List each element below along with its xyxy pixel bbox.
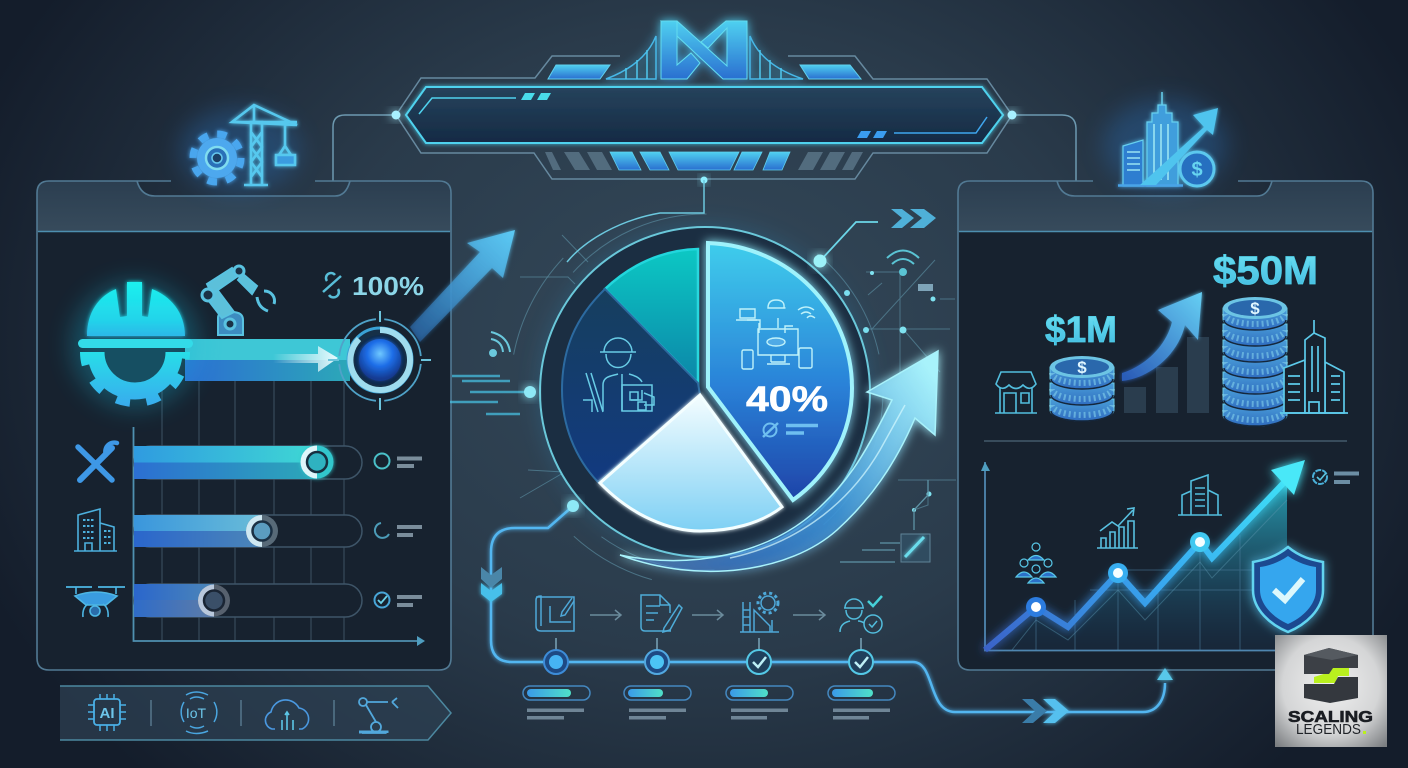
- connector lines from banner to panels: [333, 115, 1076, 181]
- banner plate: [406, 87, 1003, 143]
- white arrow: [273, 346, 338, 372]
- sweeping growth arrow: [620, 351, 938, 571]
- value: 100%: [352, 271, 424, 301]
- icon: drone: [66, 587, 125, 617]
- growth line: [985, 470, 1296, 650]
- icon: isometric building: [1178, 475, 1222, 515]
- logo dot: [1363, 731, 1366, 734]
- growth arrow: [1122, 292, 1202, 381]
- banner bottom edge highlight: [426, 142, 982, 144]
- icon: connected devices: [736, 300, 815, 369]
- coin stack: small: $: [1077, 358, 1087, 377]
- slice: teal: [605, 249, 698, 383]
- icon: document: [641, 595, 682, 632]
- banner bottom node: [700, 176, 708, 184]
- shadow line: [1012, 500, 1287, 650]
- icon: robot arm: [202, 266, 275, 335]
- chevrons: [891, 209, 936, 228]
- bar: drone: [66, 584, 422, 617]
- icon: wifi top right: [887, 250, 919, 275]
- icon: site and gear: [740, 593, 779, 632]
- panel body: [958, 232, 1373, 670]
- chevrons right: [1022, 699, 1047, 723]
- glowing segment: [670, 660, 750, 664]
- banner inner accents: [419, 93, 987, 138]
- node: [524, 386, 536, 398]
- icon: gear helmet: [71, 281, 199, 409]
- icon: mini bar chart: [1097, 508, 1138, 548]
- target dial: [328, 311, 431, 410]
- icon: robot arm: [359, 698, 398, 733]
- top right connector: [814, 209, 936, 268]
- step 4: approved engineer: [828, 596, 895, 720]
- caption placeholder: [763, 423, 818, 437]
- start node: [567, 500, 579, 512]
- icon: wifi left: [490, 332, 510, 356]
- panel divider: [984, 440, 1347, 442]
- header glow lines: [38, 196, 450, 232]
- axis arrow: [417, 636, 425, 646]
- slice: blue 40%: [708, 243, 852, 500]
- header glow lines: [959, 196, 1372, 232]
- left panel: [37, 105, 515, 670]
- streaks: [450, 376, 525, 414]
- upward arrow: [410, 230, 515, 342]
- central hub: [540, 227, 870, 557]
- icon: team: [1016, 543, 1056, 583]
- panel body: [37, 232, 451, 670]
- coin stack: large: [1223, 297, 1287, 426]
- banner outer frame: [396, 56, 1012, 179]
- growth bars: [1124, 337, 1209, 413]
- icon: tower growth arrow and coin: $: [1191, 159, 1203, 181]
- step 3: construction: [726, 593, 793, 720]
- chart grid lines: [162, 380, 344, 641]
- icon: tower growth arrow and coin: [1103, 92, 1227, 191]
- coin stack: large: $: [1250, 299, 1260, 318]
- workflow steps: [523, 593, 895, 720]
- bottom slats: [545, 152, 863, 170]
- $1M value: $1M: [1045, 309, 1117, 350]
- gear base: [80, 352, 190, 407]
- status legend: [374, 454, 422, 468]
- step 2: checklist: [624, 595, 691, 720]
- arrow inner highlight: [730, 405, 905, 558]
- arrow head up: [1157, 668, 1173, 680]
- slice: navy with engineer: [562, 289, 700, 482]
- ribbon separators: [151, 700, 334, 726]
- bridge M logo: [606, 21, 803, 79]
- step 1: blueprint: [523, 596, 590, 720]
- icon: gear and crane: [180, 105, 300, 192]
- status legend: [1313, 470, 1359, 484]
- icon: engineer with blueprint: [583, 338, 654, 412]
- hero progress bar: [185, 339, 350, 381]
- header banner: [392, 21, 1016, 184]
- chevrons down: [481, 567, 502, 588]
- area fill: [985, 480, 1287, 650]
- slice: white: [600, 395, 782, 531]
- icon: AI chip: [88, 694, 126, 731]
- top blue plates: [548, 65, 861, 79]
- y axis arrow: [981, 462, 990, 471]
- icon: engineer check: [840, 596, 882, 633]
- arrow 2: [692, 610, 723, 620]
- arrow 3: [793, 610, 825, 620]
- status legend: [375, 523, 422, 538]
- axes: [985, 462, 1285, 650]
- hub glow: [540, 227, 870, 557]
- bar: buildings: [74, 509, 422, 551]
- banner to hub connector: [567, 180, 704, 262]
- arrow head: [1271, 460, 1305, 495]
- hub disk: [540, 227, 870, 557]
- chart gridlines: [1036, 535, 1287, 650]
- icon: blueprint: [536, 596, 574, 631]
- stat: 100%: [323, 271, 424, 301]
- value: 40%: [746, 380, 828, 419]
- logo wordmark: SCALING: [1288, 709, 1373, 726]
- data points: [1026, 532, 1210, 617]
- icon: IoT: [181, 692, 217, 734]
- icon: shield: [1253, 547, 1323, 632]
- coin stack: small: [1050, 356, 1114, 421]
- small data chip: [918, 284, 933, 291]
- icon: cloud: [265, 700, 309, 730]
- logo subtitle: LEGENDS: [1296, 722, 1361, 738]
- panel outline: [958, 181, 1373, 670]
- right panel: [958, 92, 1373, 670]
- left data streams: [450, 332, 536, 414]
- arrow 1: [590, 610, 621, 620]
- status legend: [374, 592, 422, 608]
- panel outline: [37, 181, 451, 670]
- icon: storefront: [995, 372, 1037, 413]
- icon: wrench and screwdriver: [78, 443, 117, 480]
- mini chart widget: [840, 480, 930, 562]
- line chart: [981, 460, 1359, 650]
- icon: skyline: [1280, 320, 1348, 413]
- panel header band: [37, 181, 451, 232]
- workflow path: [481, 500, 1173, 723]
- icon: IoT: IoT: [186, 705, 207, 721]
- $50M value: $50M: [1213, 249, 1318, 293]
- icon: broken link: [323, 273, 341, 297]
- icon: AI chip: AI: [100, 705, 114, 722]
- bar chart axes: [134, 427, 420, 641]
- hub network lines around pie: [510, 197, 956, 587]
- logo mark: [1304, 648, 1358, 703]
- banner end nodes: [392, 110, 1016, 120]
- panel header band: [958, 181, 1373, 232]
- icon: office building: [74, 509, 117, 551]
- logo: Scaling Legends: [1275, 635, 1387, 747]
- bar: tools: [78, 443, 422, 480]
- network nodes: [560, 271, 936, 512]
- helmet dome: [87, 282, 185, 336]
- technology ribbon: [60, 686, 451, 740]
